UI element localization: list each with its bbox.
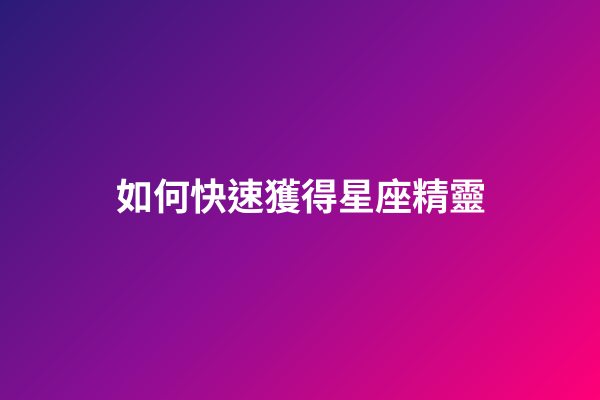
title: 如何快速獲得星座精靈 (116, 177, 486, 218)
